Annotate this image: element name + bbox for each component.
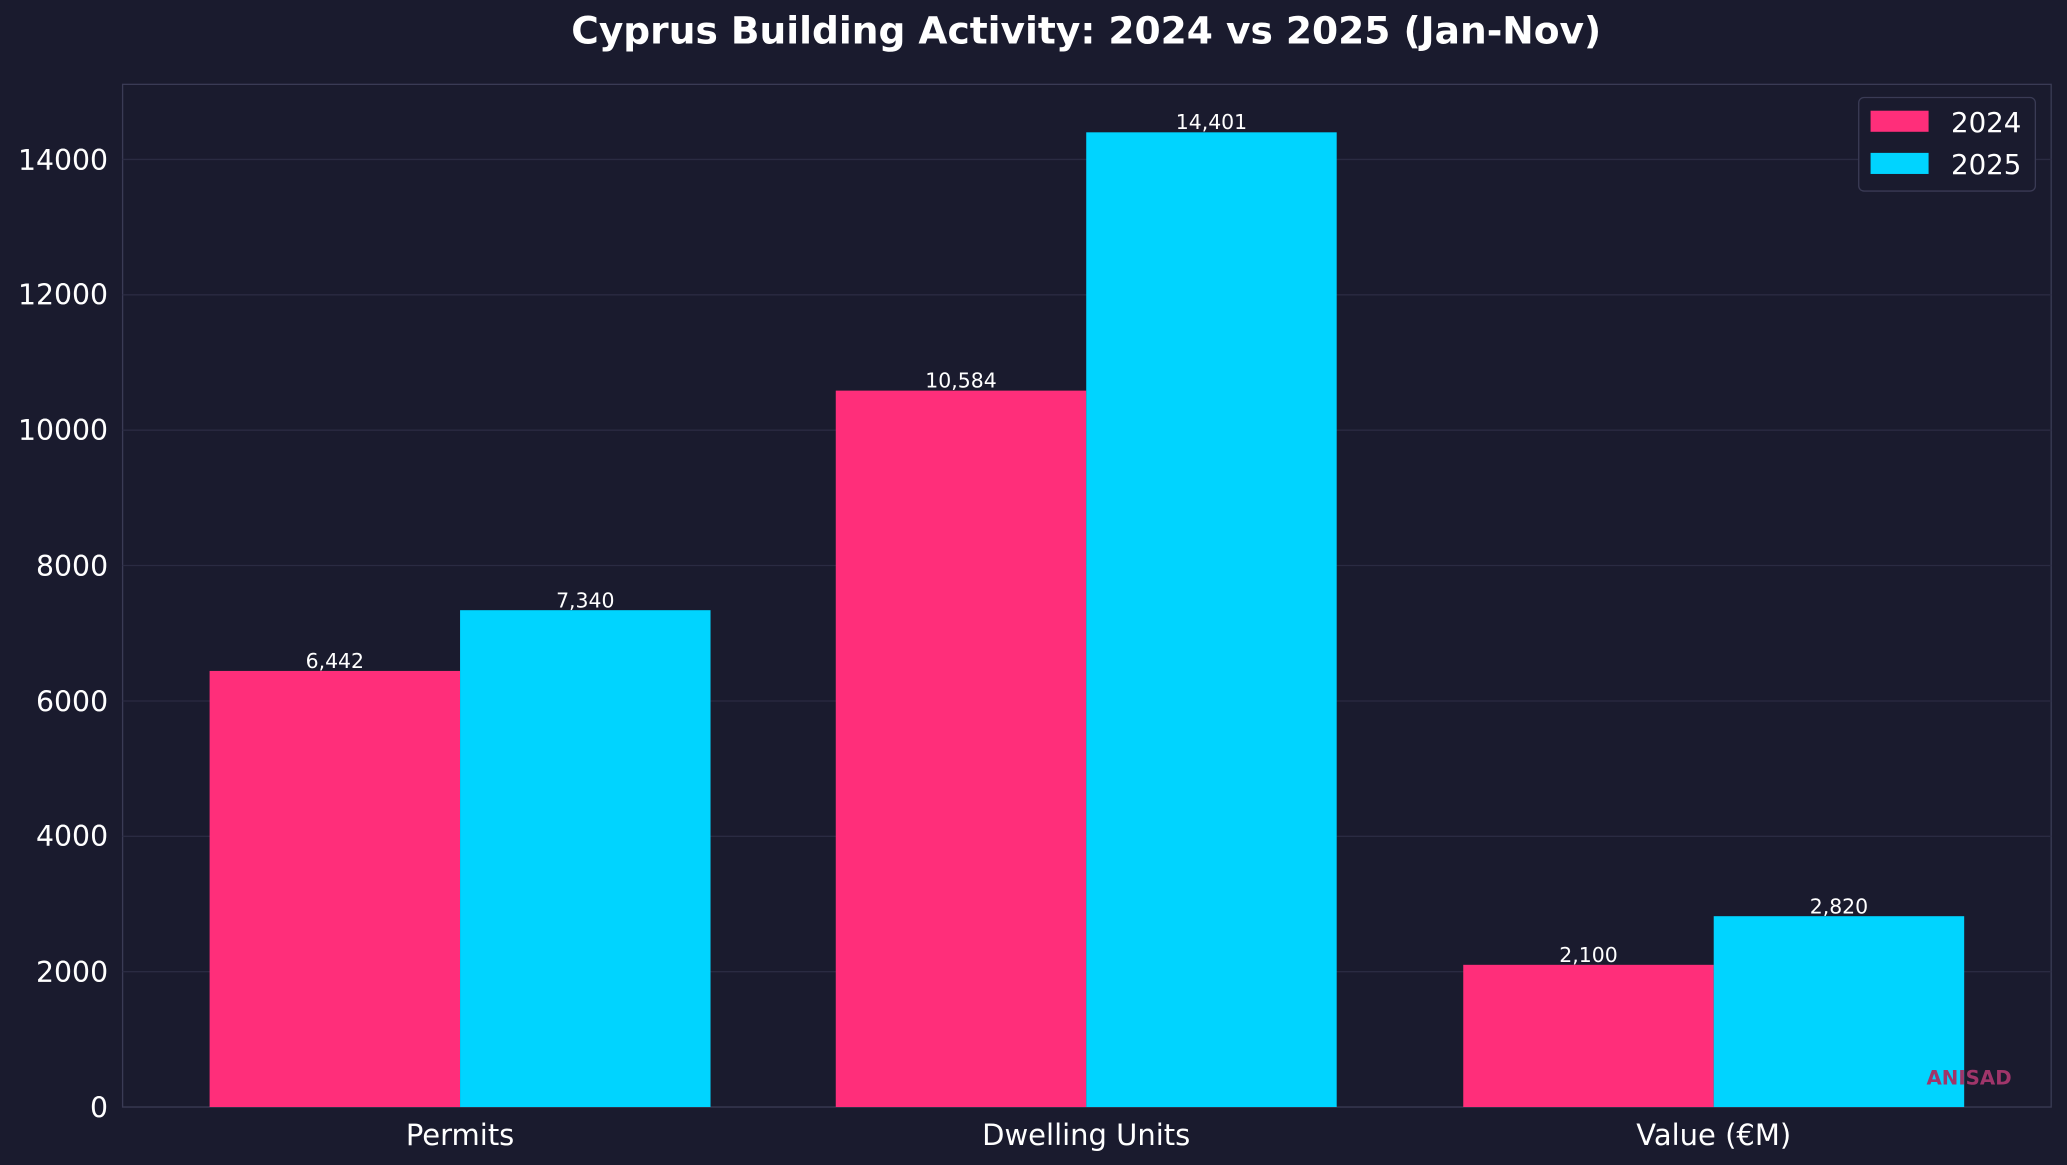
y axis labels: 0	[90, 1092, 108, 1125]
bars: Dwelling Units: 10,584	[925, 368, 997, 392]
bars: Permits: 6,442	[306, 649, 364, 673]
x axis labels: Dwelling Units	[982, 1118, 1190, 1152]
x axis labels	[406, 1118, 1791, 1152]
bars: Value: 2,820	[1810, 894, 1868, 918]
y axis labels: 14000	[18, 144, 108, 177]
bars: Dwelling Units: 14,401	[1176, 110, 1247, 134]
y axis labels: 4000	[36, 820, 108, 853]
legend: 2025	[1951, 148, 2021, 181]
title: Cyprus Building Activity: 2024 vs 2025 (Jan-Nov)	[571, 8, 1601, 52]
bars: Value: 2,100	[1559, 943, 1618, 967]
y axis labels: 8000	[36, 550, 108, 583]
watermark: ANISAD	[1926, 1067, 2012, 1090]
y axis labels: 10000	[18, 414, 108, 447]
bars: Permits: 7,340	[556, 589, 615, 613]
legend: 2024	[1951, 106, 2021, 139]
y axis labels: 6000	[36, 686, 108, 719]
y axis labels: 12000	[18, 278, 108, 311]
x axis labels: Value (€M)	[1636, 1118, 1791, 1152]
legend	[1859, 98, 2035, 191]
y axis labels: 2000	[36, 956, 108, 989]
y axis labels	[18, 144, 108, 1125]
bars: Permits	[210, 589, 711, 1107]
bars: Value	[1463, 894, 1964, 1107]
bars: Dwelling Units	[836, 110, 1337, 1107]
x axis labels: Permits	[406, 1118, 514, 1152]
